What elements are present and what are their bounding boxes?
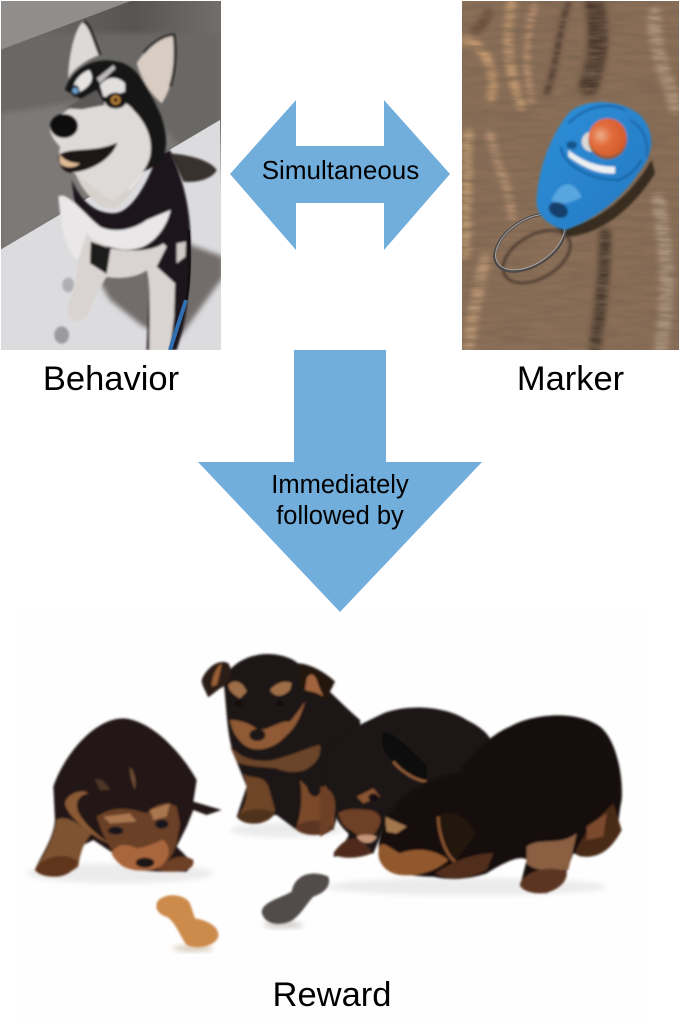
tail [170,153,217,182]
leash [170,300,186,350]
left ear [68,22,100,78]
puppy: left [27,718,343,952]
ridge ring [568,106,647,157]
clicker body [537,102,651,230]
label: Marker: Marker [517,360,624,398]
treat: orange bone [156,895,218,947]
label: Immediately followed by: followed by [276,502,404,530]
key hole [548,201,569,219]
neck [74,170,148,208]
clicker shadow [555,160,655,237]
ring shadow [500,228,573,286]
puppy: sitting [202,654,363,835]
down arrow: immediately followed by [198,350,482,612]
puppy: third [320,708,607,895]
mouth [58,143,117,173]
nose [50,114,78,138]
double arrow: simultaneous [230,100,450,250]
orange button [587,137,629,161]
white ruff [58,195,171,260]
chest and legs [67,235,178,350]
dark head [65,60,166,173]
harness [90,242,111,274]
puppy: right [378,715,622,893]
eyes [71,85,80,97]
white face [50,101,151,200]
shadow and paw prints [97,243,223,337]
label: Behavior: Behavior [43,360,179,398]
dark body [72,150,191,350]
photo: clicker on wood (marker) [462,1,679,350]
key ring [493,213,567,273]
right ear [137,35,175,103]
brows [73,70,92,93]
label: Reward: Reward [273,976,391,1014]
photo: puppies with treats (reward) [28,652,624,954]
treat: grey bone [262,873,329,924]
photo: husky (behavior) [0,0,223,353]
label: Simultaneous: Simultaneous [262,155,419,185]
slot [568,150,615,174]
label: Immediately followed by: Immediately [271,471,409,499]
